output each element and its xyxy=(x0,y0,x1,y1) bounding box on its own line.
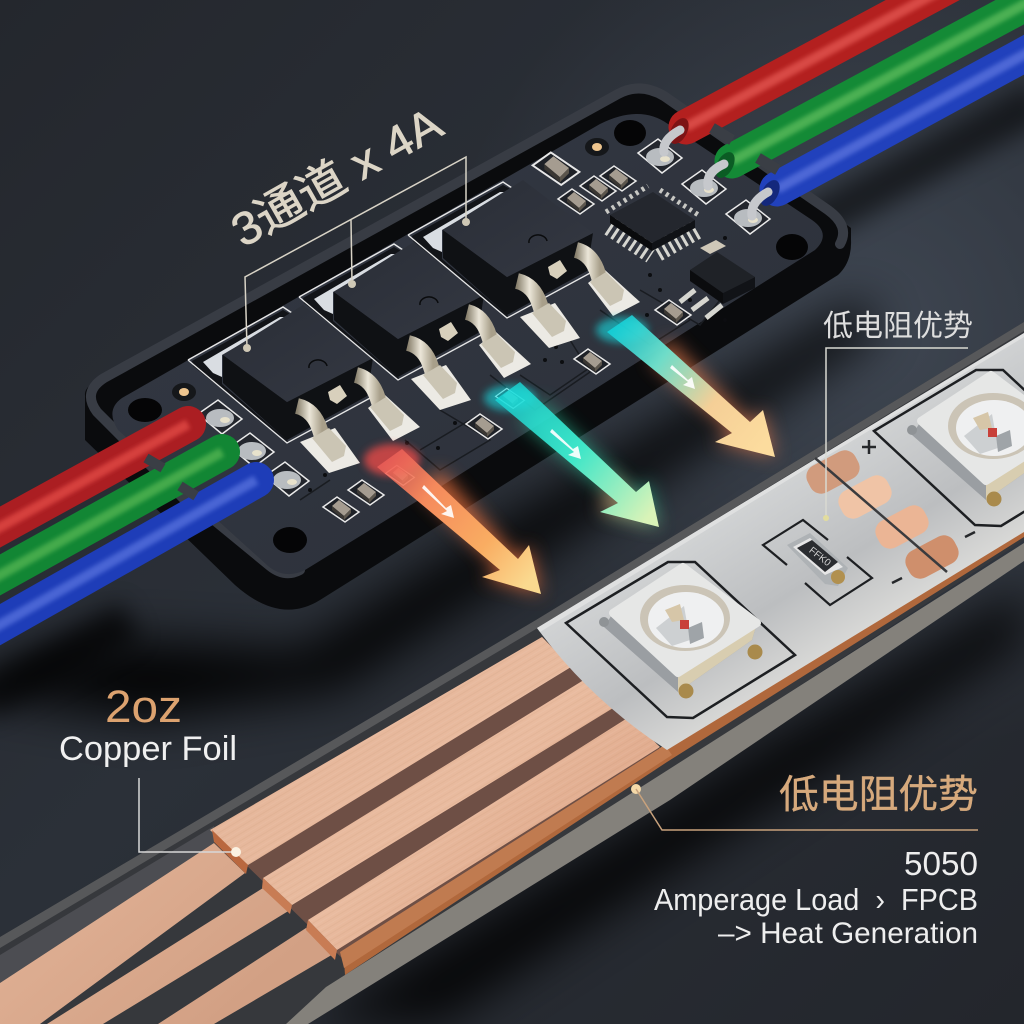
LED chip 2 xyxy=(874,370,1024,526)
arrow: red channel xyxy=(377,449,541,594)
callout: low resistance, top xyxy=(823,310,973,521)
arrow: blue channel xyxy=(607,315,775,457)
board black body xyxy=(85,87,851,610)
blue wire xyxy=(752,46,1024,216)
MOSFET 2 xyxy=(299,242,531,410)
grey backing band xyxy=(286,543,1024,1024)
LED strip xyxy=(0,322,1024,1024)
copper edge xyxy=(344,526,1024,975)
controller board xyxy=(85,87,851,610)
resistor: FFK0 xyxy=(807,545,833,569)
transistor chip xyxy=(680,240,755,318)
traces xyxy=(300,236,727,500)
white flexible PCB xyxy=(537,333,1024,750)
green wire xyxy=(0,452,222,586)
lower copper strips xyxy=(0,843,335,1024)
wire clips xyxy=(712,128,778,170)
red wire xyxy=(664,0,960,152)
wire clips xyxy=(146,458,196,496)
upper copper block xyxy=(210,637,672,968)
green wire xyxy=(708,0,1024,186)
resistor xyxy=(763,520,872,605)
text block: amperage load and heat: 5050 xyxy=(904,845,978,882)
text block: amperage load and heat: Amperage Load › FPCB xyxy=(654,882,978,917)
callout: 2oz copper foil: Copper Foil xyxy=(59,730,237,768)
MOSFET 1 xyxy=(188,305,420,473)
callout: 2oz copper foil xyxy=(59,681,241,857)
clear tube xyxy=(0,322,1024,1024)
callout: low resistance advantage xyxy=(631,774,978,830)
callout: low resistance, top: 低电阻优势 xyxy=(823,310,973,343)
blue wire xyxy=(0,480,256,636)
rim: rear and left edge xyxy=(91,88,843,573)
red wire xyxy=(0,424,188,538)
wires: top right xyxy=(664,0,1024,216)
copper pads xyxy=(802,440,975,583)
heading: 3 channels x 4A: 3通道 x 4A xyxy=(222,97,451,257)
arrow: green channel xyxy=(495,382,659,527)
text block: amperage load and heat: –> Heat Generation xyxy=(718,917,978,950)
MOSFET 3 xyxy=(408,180,640,348)
surface-mount components xyxy=(323,152,691,522)
circuit board xyxy=(112,114,823,574)
callout: low resistance advantage: 低电阻优势 xyxy=(779,774,978,817)
mounting holes xyxy=(128,120,808,553)
callout lines: 3 channels xyxy=(243,157,470,352)
text block: amperage load and heat xyxy=(654,845,978,950)
solder pads xyxy=(198,139,770,496)
LED chip 1 xyxy=(566,562,795,718)
callout: 2oz copper foil: 2oz xyxy=(105,681,182,732)
wires: bottom left xyxy=(0,424,256,636)
arrow glows xyxy=(364,317,775,594)
gold vias xyxy=(172,138,609,401)
microcontroller chip xyxy=(606,186,700,254)
